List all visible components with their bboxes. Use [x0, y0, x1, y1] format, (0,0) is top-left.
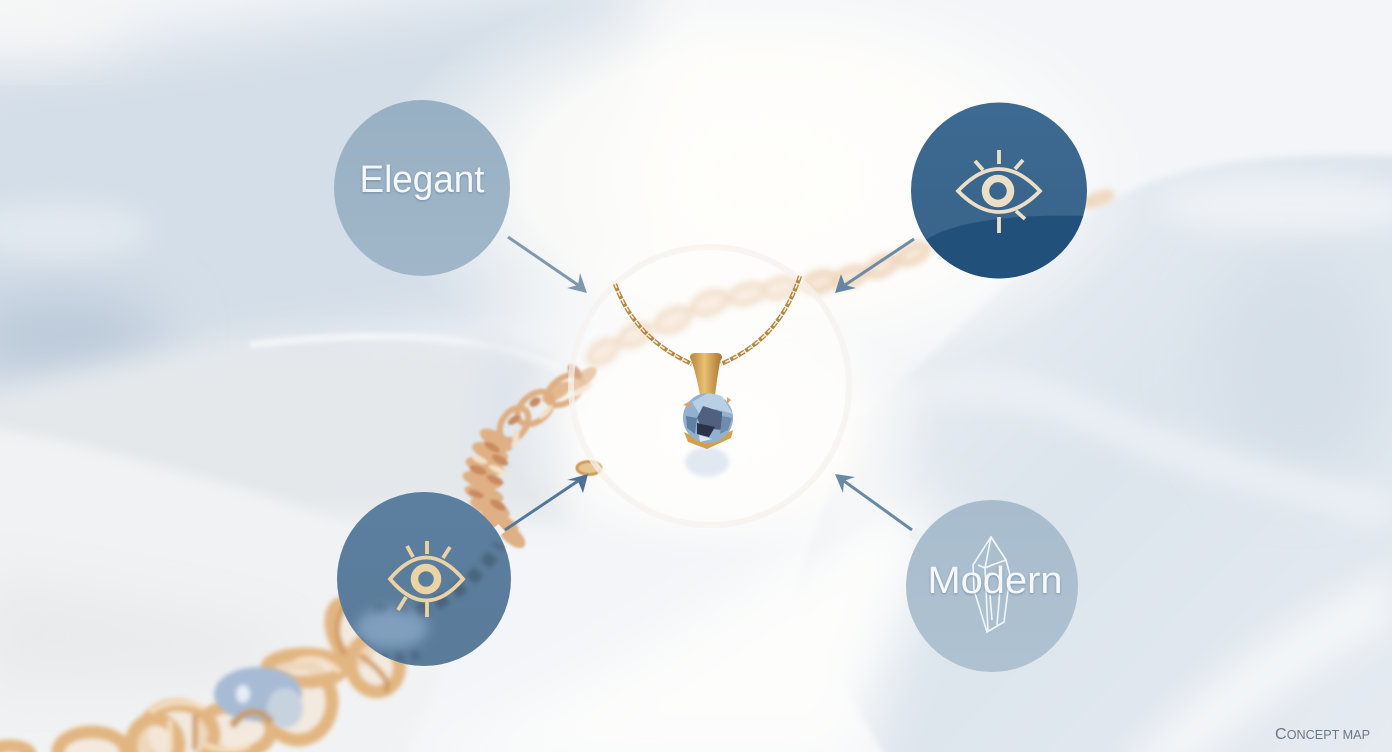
- label: Modern: Modern: [928, 560, 1062, 602]
- concept node: Elegant: [334, 100, 510, 276]
- small chain end behind ring: [577, 462, 601, 474]
- icon: eye: [958, 150, 1040, 233]
- concept node: vision eye, medium: [337, 492, 511, 666]
- icon: eye: [390, 541, 463, 617]
- concept node: vision eye, dark: [900, 102, 1090, 290]
- arrow: Modern to centre: [835, 474, 924, 542]
- arrow: Elegant to centre: [508, 237, 587, 293]
- label: Elegant: Elegant: [360, 159, 485, 201]
- gem reflection: [685, 447, 729, 477]
- concept node: Modern: [906, 500, 1078, 672]
- blurred gold chain, large foreground rings: [0, 598, 407, 752]
- blurred gem on chain: [214, 667, 303, 728]
- central circle: pendant: [571, 247, 849, 525]
- icon: crystal: [973, 537, 1010, 632]
- blurred gold chain, curb links: [461, 362, 601, 552]
- caption: concept map: CONCEPT MAP: [1275, 726, 1370, 743]
- pendant bail: [690, 353, 722, 395]
- gemstone: [683, 393, 733, 449]
- arrow: bottom-left eye to centre: [491, 474, 588, 538]
- blurred gold chain, upper faint run: [585, 190, 1113, 369]
- chain seen through the node: [356, 545, 500, 660]
- arrow: top-right eye to centre: [835, 239, 914, 293]
- pendant chain: [615, 276, 800, 364]
